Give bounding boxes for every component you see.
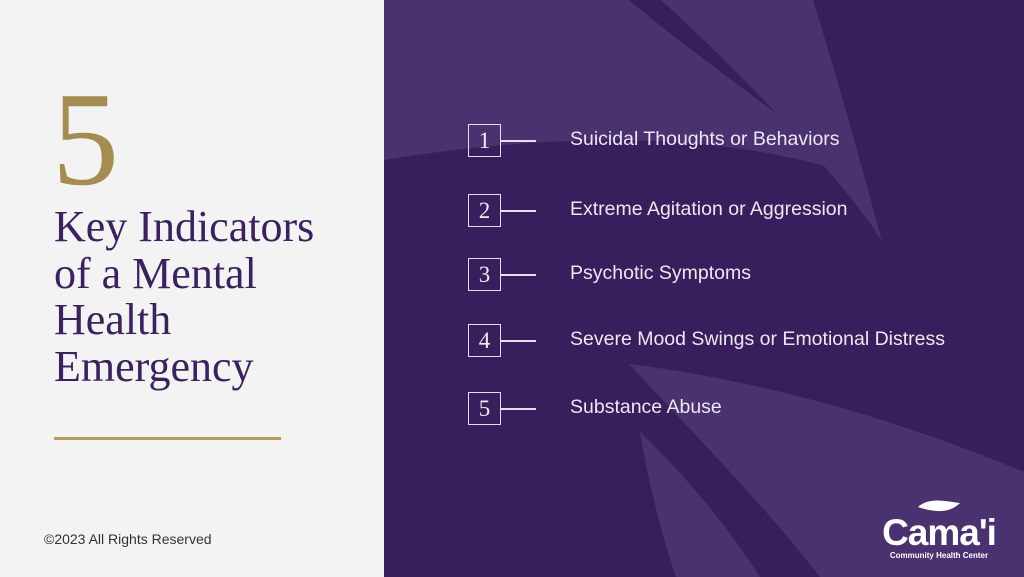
item 5: 5 bbox=[479, 396, 490, 421]
title: of a Mental bbox=[54, 248, 257, 298]
panel: right bbox=[384, 0, 1024, 577]
item 2: Extreme Agitation or Aggression bbox=[570, 198, 848, 220]
icon: wave bbox=[918, 500, 960, 512]
item 5 bbox=[468, 392, 722, 425]
item 3: 3 bbox=[479, 262, 490, 287]
item 3: Psychotic Symptoms bbox=[570, 262, 751, 284]
logo: Community Health Center bbox=[890, 551, 988, 560]
item 1: 1 bbox=[479, 128, 490, 153]
panel: left bbox=[0, 0, 384, 577]
logo: Cama'i bbox=[882, 512, 996, 553]
title: Key Indicators bbox=[54, 202, 314, 251]
item 1 bbox=[468, 124, 840, 157]
title: Health bbox=[54, 295, 171, 344]
item 4 bbox=[468, 324, 945, 357]
item 4: 4 bbox=[479, 328, 490, 353]
item 2: 2 bbox=[479, 198, 490, 223]
item 5: Substance Abuse bbox=[570, 396, 722, 418]
big number: 5 bbox=[52, 65, 119, 213]
item 3 bbox=[468, 258, 751, 291]
item 2 bbox=[468, 194, 848, 227]
title bbox=[54, 202, 314, 390]
logo bbox=[882, 500, 996, 560]
title: Emergency bbox=[54, 342, 254, 390]
item 4: Severe Mood Swings or Emotional Distress bbox=[570, 328, 945, 350]
copyright: ©2023 All Rights Reserved bbox=[44, 531, 212, 547]
gold rule bbox=[54, 437, 281, 440]
background swooshes bbox=[384, 0, 1024, 577]
item 1: Suicidal Thoughts or Behaviors bbox=[570, 128, 840, 150]
